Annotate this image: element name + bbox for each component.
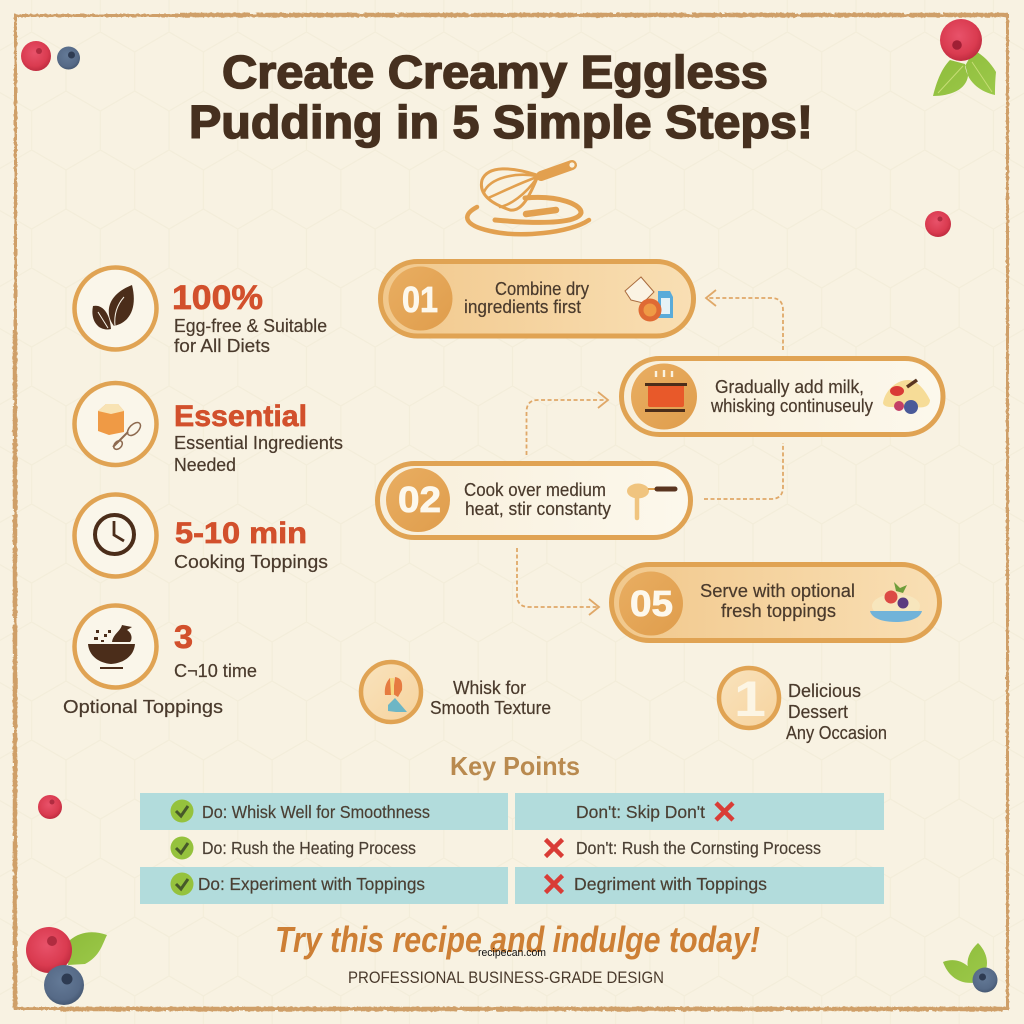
- stat: egg-free: Egg-free & Suitable: [174, 316, 327, 336]
- do row 3: Do: Experiment with Toppings: [198, 874, 425, 894]
- step 05 pill: [612, 564, 940, 640]
- whisk tip badge: Smooth Texture: [430, 698, 551, 718]
- stat: optional toppings: C¬10 time: [174, 661, 257, 681]
- occasion badge: Delicious: [788, 681, 861, 701]
- icon: custard with berries: [883, 380, 930, 414]
- icon: flour box, butter, milk carton: [625, 277, 673, 322]
- step number 01: [388, 266, 452, 330]
- whisk tip badge: Whisk for: [453, 678, 526, 698]
- footer tagline: PROFESSIONAL BUSINESS-GRADE DESIGN: [348, 969, 664, 987]
- number 1 badge: 1: [734, 671, 766, 727]
- do row 1: Do: Whisk Well for Smoothness: [202, 802, 430, 822]
- icon: whisk splash: [361, 662, 421, 722]
- icon: whisk and swirl: [467, 162, 589, 234]
- teal row backgrounds: [140, 793, 884, 904]
- step number 02: 02: [398, 479, 441, 520]
- decorative berries: top left: [21, 41, 80, 71]
- stat: egg-free: [74, 268, 327, 356]
- step 02 pill: [378, 464, 690, 538]
- decorative berry and leaves: bottom right: [943, 943, 998, 992]
- icon: pot on stove: [631, 364, 697, 430]
- step milk pill: Gradually add milk,: [715, 377, 864, 397]
- don't row 3: Degriment with Toppings: [574, 874, 767, 894]
- call to action: Try this recipe and indulge today!: [275, 919, 760, 960]
- panel: stats column: [63, 268, 343, 717]
- watermark: recipecan.com: [478, 947, 546, 959]
- don't row 1: Don't: Skip Don't: [576, 802, 705, 822]
- stat: essential ingredients: Needed: [174, 455, 236, 475]
- stat: egg-free: 100%: [172, 279, 263, 317]
- step 01 pill: Combine dry: [495, 279, 589, 299]
- arrow: step 3 to step 1: [706, 290, 783, 350]
- decorative berries and leaf: bottom left: [26, 927, 107, 1005]
- stat: optional toppings: 3: [174, 619, 193, 655]
- icon: leaves: [74, 268, 156, 350]
- step number 02: [386, 468, 450, 532]
- decorative berry: left: [38, 795, 62, 819]
- step milk pill: [622, 358, 943, 434]
- step 01 pill: [380, 262, 694, 336]
- stat: essential ingredients: Essential Ingredients: [174, 433, 343, 453]
- decorative berry and leaves: top right: [933, 19, 996, 96]
- occasion badge: [719, 668, 887, 743]
- decorative berry: right: [925, 211, 951, 237]
- step number 05: [619, 572, 683, 636]
- arrow: step 2 to step 3: [526, 392, 608, 455]
- arrow: connector from step 2 to step 3 right side: [704, 443, 783, 499]
- do row 2: Do: Rush the Heating Process: [202, 838, 416, 858]
- icon: bowl with toppings: [74, 606, 156, 688]
- occasion badge: Dessert: [788, 702, 848, 722]
- step number 05: 05: [630, 583, 673, 624]
- icon: jar and whisk: [74, 383, 156, 465]
- stat: optional toppings: Optional Toppings: [63, 697, 223, 717]
- don't row 2: Don't: Rush the Cornsting Process: [576, 838, 821, 858]
- step 02 pill: heat, stir constanty: [465, 499, 611, 519]
- step milk pill: whisking continuseuly: [710, 396, 873, 416]
- icon: clock: [74, 494, 156, 576]
- stat: optional toppings: [63, 606, 257, 717]
- step 05 pill: fresh toppings: [721, 601, 836, 621]
- title: [189, 46, 813, 148]
- title: Create Creamy Eggless: [222, 46, 768, 98]
- whisk tip badge: [361, 662, 551, 722]
- number 1 badge: [719, 668, 779, 728]
- stat: cooking time: [74, 494, 328, 576]
- stat: cooking time: Cooking Toppings: [174, 552, 328, 572]
- step 02 pill: Cook over medium: [464, 480, 606, 500]
- stat: essential ingredients: Essential: [174, 400, 307, 433]
- icon: ladle: [627, 484, 675, 518]
- panel: do and don't table: [140, 793, 884, 904]
- step number 01: 01: [402, 279, 438, 320]
- title: Pudding in 5 Simple Steps!: [189, 96, 813, 148]
- stat: essential ingredients: [74, 383, 343, 475]
- heading: key points: Key Points: [450, 751, 580, 781]
- step 05 pill: Serve with optional: [700, 581, 855, 601]
- stat: egg-free: for All Diets: [174, 336, 270, 356]
- stat: cooking time: 5-10 min: [175, 517, 307, 550]
- occasion badge: Any Occasion: [786, 723, 887, 743]
- arrow: step 2 to step 5: [517, 548, 599, 615]
- step 01 pill: ingredients first: [464, 297, 581, 317]
- icon: bowl of berries: [870, 582, 922, 622]
